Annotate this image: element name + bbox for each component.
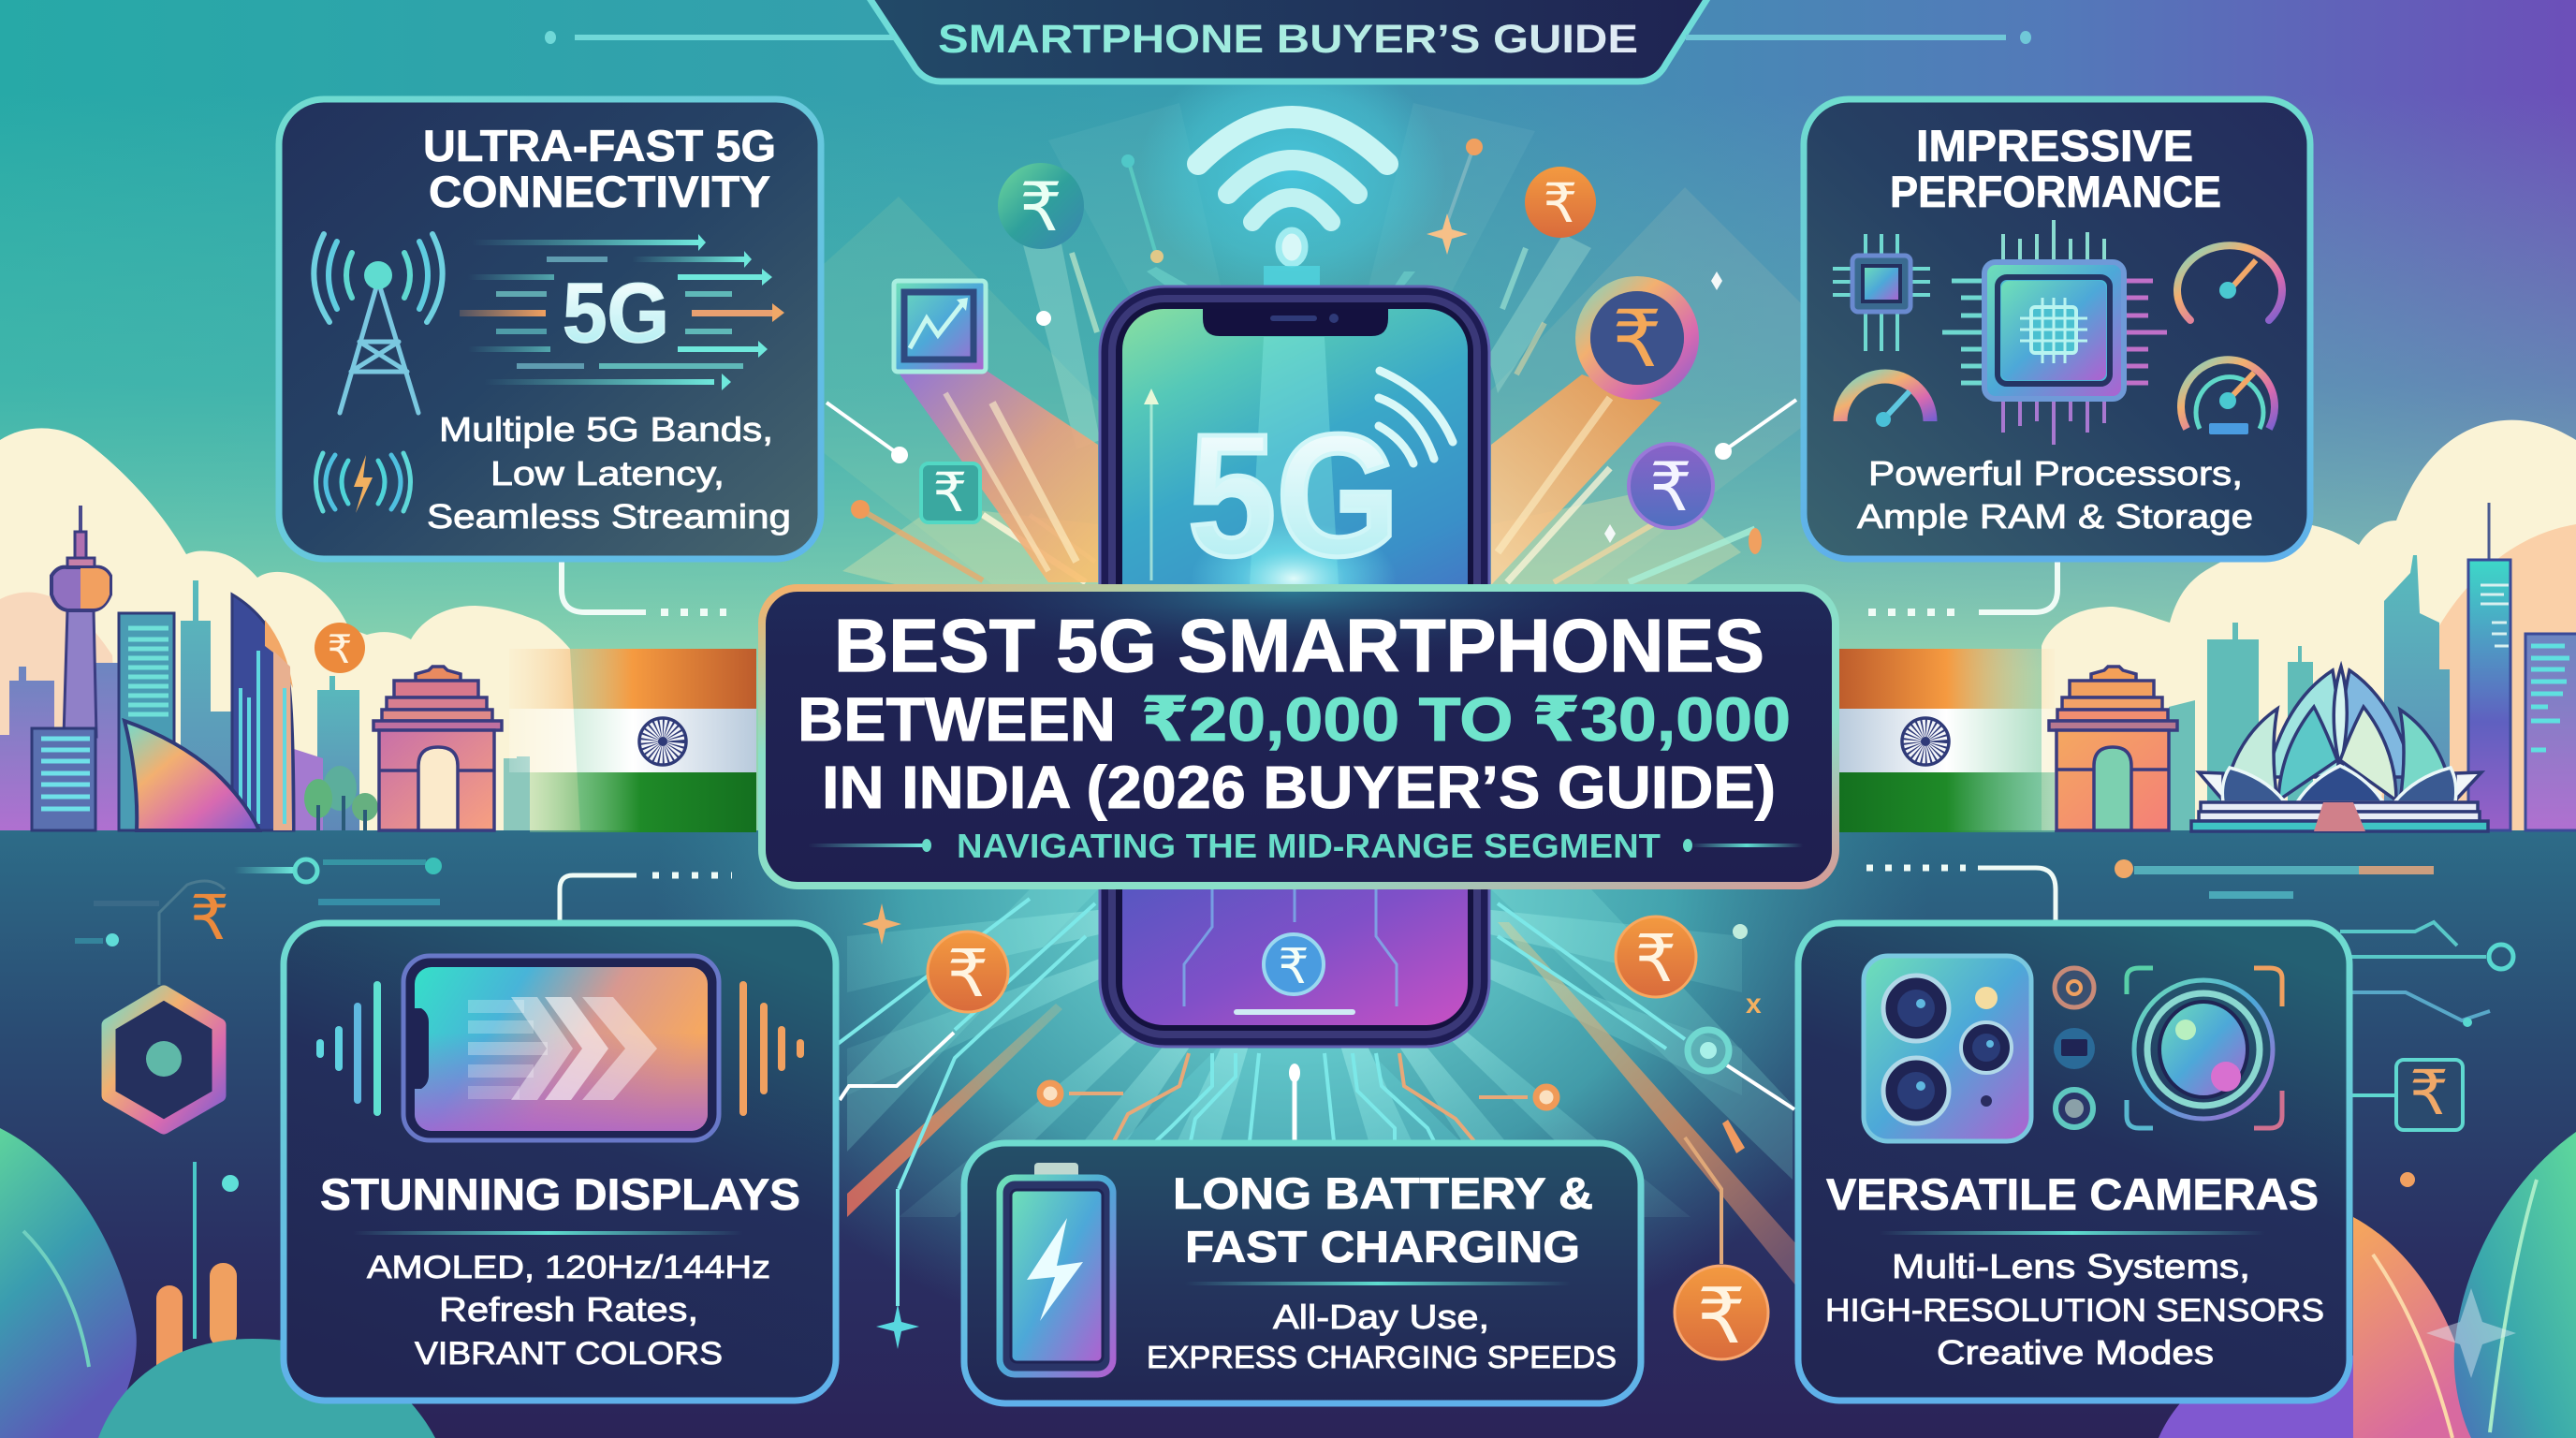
base glow on screen [1191,522,1397,635]
icon: growth chart [894,281,986,372]
coin: large rupee [1575,276,1699,400]
title line 2: ₹20,000 TO ₹30,000 [1141,684,1791,754]
beam: from big coin to phone [1491,374,1661,585]
coin: large rupee: ₹ [1612,295,1662,383]
icon: display phone [403,956,719,1140]
curved tower [232,594,294,830]
india gate: left [373,667,502,830]
banner title: SMARTPHONE BUYER’S GUIDE [938,17,1638,62]
india gate: right [2049,667,2177,830]
icon: battery [1000,1163,1113,1374]
screen rupee badge: ₹ [1278,940,1310,994]
icon: large lens [2127,968,2282,1128]
decor: left leaves [0,1128,435,1438]
description: Seamless Streaming [427,497,791,536]
heading: LONG BATTERY & [1173,1168,1593,1218]
subtitle: NAVIGATING THE MID-RANGE SEGMENT [957,827,1661,865]
dot [1733,924,1748,939]
title line 1: BEST 5G SMARTPHONES [834,604,1764,687]
panel: long battery and fast charging [964,1143,1641,1403]
rule [353,1231,743,1235]
connector: 5G panel to phone [827,403,908,463]
screen rupee badge [1264,934,1324,994]
coin: orange rupee top [1525,167,1596,238]
clouds: right [2042,420,2576,830]
coin: green rupee: ₹ [1019,170,1062,245]
heading [1173,1168,1593,1271]
description [367,1250,770,1372]
heading [1890,121,2221,216]
description: HIGH-RESOLUTION SENSORS [1825,1293,2324,1328]
home bar [1234,1009,1355,1015]
tv tower [51,506,110,737]
right office block [2525,634,2576,830]
description: Low Latency, [490,454,724,492]
connector: cameras panel to title [1866,868,2056,920]
node: orange left [1040,1083,1061,1104]
description [1857,454,2253,536]
beam: from chart to phone [899,371,1098,582]
heading: STUNNING DISPLAYS [320,1169,800,1219]
heading: VERSATILE CAMERAS [1826,1169,2319,1219]
panel: impressive performance [1804,99,2310,559]
top banner [866,0,1711,81]
description: AMOLED, 120Hz/144Hz [367,1250,770,1285]
coin: purple rupee [1629,444,1713,528]
coin: left skyline rupee [315,623,365,673]
coin: orange rupee lower left: ₹ [947,937,988,1010]
decor: right leaves [2159,1132,2576,1438]
connector: 5G panel to title [562,561,726,612]
connector: displays panel to title [560,875,732,920]
node: orange right [1536,1087,1557,1108]
ground background [0,830,2576,1438]
arrow on screen [1144,389,1159,580]
heading [423,121,776,216]
coin: left skyline rupee: ₹ [328,627,352,671]
description: VIBRANT COLORS [415,1336,723,1372]
near office block [32,728,95,830]
glass skyscraper [2468,503,2510,830]
clouds: left [0,428,580,830]
heading: FAST CHARGING [1185,1222,1580,1271]
notch [1203,309,1388,336]
title line 2 [798,684,1791,754]
peach sky glows behind skylines [0,524,2576,830]
icon: gauge top right [2177,245,2282,320]
icon: small chip [1833,234,1930,351]
screen traces [1184,887,1397,1006]
coin: orange rupee lower right [1616,917,1696,997]
sparkle teal [876,1304,919,1349]
5G speed lines [460,234,784,390]
blue office block [119,613,174,830]
panel: versatile cameras [1798,923,2349,1401]
decor: right ground lines [2115,859,2513,1187]
coin: orange rupee lower right: ₹ [1635,922,1676,995]
icon: gauge bottom right [2181,360,2275,434]
light rays around phone top [842,139,1762,585]
description: Multiple 5G Bands, [439,410,773,448]
icon: rupee tile right [2349,1058,2463,1130]
background buildings [2169,555,2450,830]
description [1147,1298,1617,1374]
title line 3: IN INDIA (2026 BUYER’S GUIDE) [822,754,1776,821]
indian flag: right [1838,649,2055,832]
description: Powerful Processors, [1868,454,2243,492]
indian flag: left [509,649,756,832]
lotus temple [2191,667,2488,831]
subtitle rule right [1683,839,1803,852]
coin: orange rupee bottom [1675,1266,1768,1359]
coin: purple rupee: ₹ [1649,450,1692,525]
heading: ULTRA-FAST 5G [423,121,776,170]
coin: orange rupee bottom: ₹ [1697,1274,1746,1359]
5G logo: 5G [1188,399,1399,593]
coin: orange rupee top: ₹ [1544,173,1577,234]
icon: camera module [1864,956,2031,1141]
panel: stunning displays [284,923,836,1401]
sparkle orange [862,903,901,945]
banner line: left [545,31,895,44]
rule [1880,1231,2265,1235]
sky background [0,0,2576,838]
node: right circuit [1688,1030,1729,1071]
icon: refresh wave bars [320,985,800,1112]
panel: ultra-fast 5G connectivity [279,99,821,559]
phone [1100,286,1489,1047]
description: All-Day Use, [1273,1298,1489,1336]
icon: rupee tile [921,462,980,523]
description [1825,1247,2324,1372]
subtitle rule left [808,839,931,852]
title line 2: BETWEEN [798,684,1116,754]
description: Creative Modes [1937,1333,2214,1372]
coin: green rupee [998,163,1084,249]
screen wifi arcs [1379,371,1453,463]
heading: IMPRESSIVE [1916,121,2193,170]
rainbow fin building [124,721,259,830]
connector: performance panel to phone [1715,400,1796,460]
5G label: 5G [563,267,669,360]
icon: cell tower [314,234,443,413]
skyline: left [0,506,756,832]
description: Multi-Lens Systems, [1892,1247,2250,1285]
icon: rupee tile right: ₹ [2409,1058,2449,1127]
rule [1185,1282,1571,1285]
description: Ample RAM & Storage [1857,497,2253,536]
icon: rupee tile: ₹ [933,462,967,523]
wifi icon above phone [1198,117,1387,286]
icon: gauge bottom left [1840,376,1930,427]
description: Refresh Rates, [439,1290,698,1328]
skyline: right [1838,503,2576,832]
description [427,410,791,536]
background buildings [0,580,530,830]
screen light beam [1250,337,1339,585]
decor: left ground icons: ₹ [190,883,229,952]
icon: signal bolt [316,453,410,513]
heading: PERFORMANCE [1890,167,2221,216]
description: EXPRESS CHARGING SPEEDS [1147,1340,1617,1374]
heading: CONNECTIVITY [429,167,770,216]
icon: mode dials [2054,968,2095,1127]
connector: performance panel to title [1868,561,2057,612]
decor: left ground icons [75,858,442,985]
small cross: x [1746,989,1762,1020]
sparkle [1427,213,1468,255]
coin: orange rupee lower left [928,932,1008,1012]
icon: large processor [1942,220,2167,445]
trees [304,766,378,830]
icon: hexagon lens [109,992,219,1127]
banner line: right [1686,31,2031,44]
panel: main title [762,588,1836,886]
lower rays and circuit lines [838,889,1797,1306]
chevrons [468,997,657,1100]
